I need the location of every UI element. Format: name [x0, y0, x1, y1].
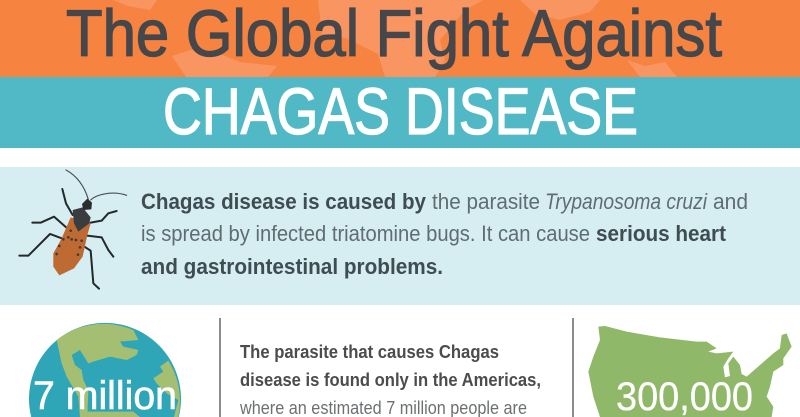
- USA map with 300,000 stat: [588, 326, 792, 417]
- icon: globe: [29, 323, 181, 417]
- text block: parasite in the Americas: The parasite that causes Chagas: [240, 341, 499, 362]
- intro text: serious heart: [596, 221, 727, 246]
- intro text: is spread by infected triatomine bugs. It can cause: [141, 221, 590, 246]
- stat: 7 million: 7 million: [33, 374, 177, 417]
- divider: [219, 318, 221, 417]
- icon: triatomine bug: [19, 170, 127, 289]
- subtitle: Chagas Disease: CHAGAS DISEASE: [163, 74, 638, 148]
- intro text: Trypanosoma cruzi: [545, 189, 708, 214]
- text block: parasite in the Americas: [239, 341, 541, 417]
- intro text: [141, 189, 748, 279]
- intro text: and gastrointestinal problems.: [141, 254, 443, 279]
- intro text: and: [713, 189, 748, 214]
- icon: USA map: [588, 326, 792, 417]
- teal band: [0, 77, 800, 148]
- panel: intro: [0, 167, 800, 305]
- intro text: Chagas disease is caused by: [141, 189, 427, 214]
- divider: [572, 318, 574, 417]
- intro text: the parasite: [432, 189, 540, 214]
- header orange band: [0, 0, 800, 77]
- text block: parasite in the Americas: disease is found only in the Americas,: [240, 369, 541, 390]
- globe with 7 million stat: [29, 323, 181, 417]
